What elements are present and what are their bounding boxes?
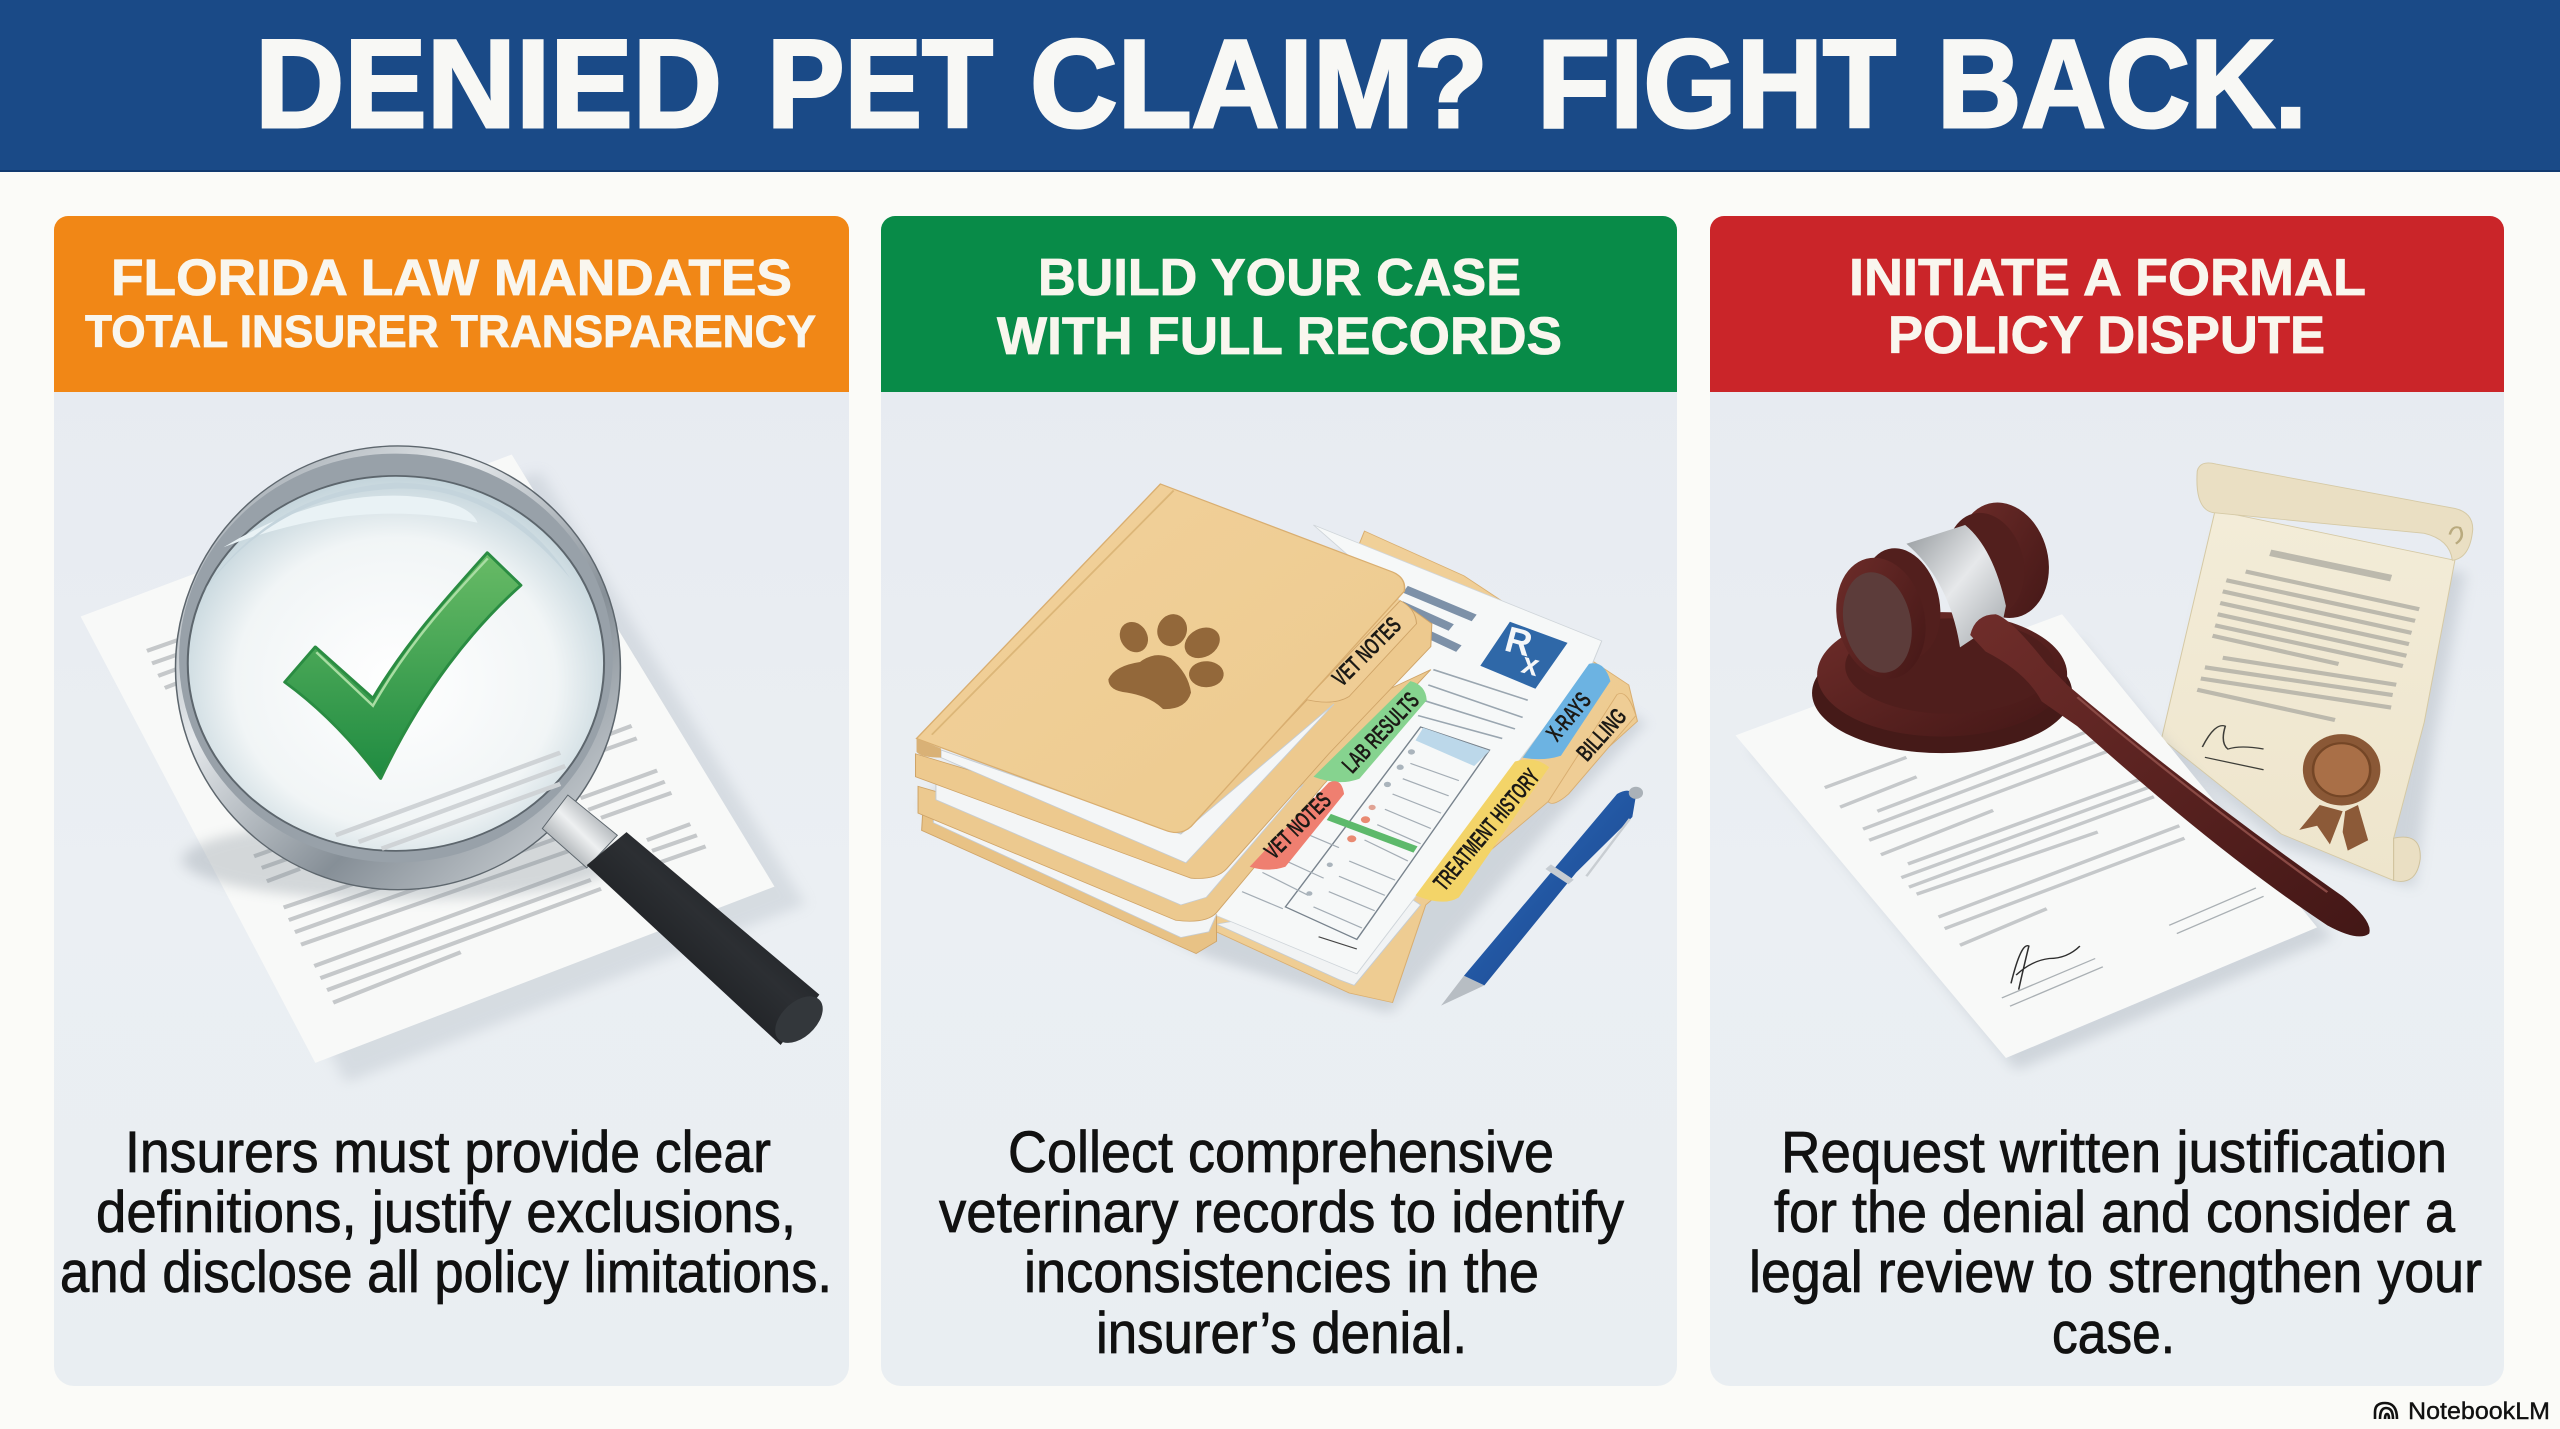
x-rays tab — [1523, 663, 1610, 759]
panel body text: inconsistencies in the — [1024, 1240, 1539, 1305]
title banner: DENIED — [255, 15, 722, 154]
panel heading: INITIATE A FORMAL — [1849, 249, 2366, 307]
panel heading: POLICY DISPUTE — [1888, 306, 2325, 365]
panel heading: WITH FULL RECORDS — [997, 307, 1562, 366]
panel body text: and disclose all policy limitations. — [60, 1240, 832, 1305]
icon: stacked pet record folders and pen — [916, 484, 1645, 1014]
panel: build your case — [881, 216, 1677, 1386]
handle — [542, 795, 832, 1051]
paw print — [1108, 613, 1230, 709]
folder tab labels: LAB RESULTS — [1337, 687, 1425, 779]
panel: Florida law transparency — [54, 216, 849, 1386]
panel body text: veterinary records to identify — [939, 1180, 1624, 1245]
signed document — [1736, 614, 2332, 1070]
panel heading: FLORIDA LAW MANDATES — [111, 249, 792, 306]
folder tab labels: X-RAYS — [1541, 687, 1597, 747]
under sheet — [1217, 892, 1421, 985]
lower folder stack — [916, 601, 1432, 954]
panel heading — [997, 249, 1562, 366]
panel background — [54, 380, 849, 1386]
panel heading: TOTAL INSURER TRANSPARENCY — [85, 306, 816, 357]
panel: formal policy dispute — [1710, 216, 2504, 1386]
title banner — [0, 0, 2560, 172]
panel heading — [85, 249, 816, 357]
panel heading: BUILD YOUR CASE — [1038, 249, 1521, 307]
gavel — [1812, 498, 2370, 936]
panel body text: Insurers must provide clear — [125, 1120, 771, 1185]
check mark — [285, 553, 521, 779]
panel background — [1710, 380, 2504, 1386]
pen — [1441, 787, 1643, 1006]
folder tab labels: VET NOTES — [1327, 612, 1407, 692]
panel body text: insurer’s denial. — [1096, 1301, 1467, 1366]
icon: gavel, signed document and sealed scroll — [1736, 463, 2473, 1070]
wax seal and ribbon — [2299, 734, 2380, 851]
top folder cover — [917, 484, 1405, 833]
panel body text: legal review to strengthen your — [1749, 1240, 2482, 1305]
billing tab — [1548, 693, 1636, 803]
lens rim — [176, 446, 620, 890]
top vet notes tab — [1306, 601, 1417, 702]
folder tab labels: TREATMENT HISTORY — [1428, 764, 1546, 896]
panel body text: Collect comprehensive — [1008, 1120, 1554, 1185]
panel body text: for the denial and consider a — [1774, 1180, 2456, 1245]
panel heading — [1849, 249, 2366, 365]
lab results tab — [1313, 681, 1427, 782]
back folder — [1204, 531, 1637, 1003]
panel body text — [939, 1120, 1624, 1366]
title banner: CLAIM? — [1030, 15, 1488, 154]
treatment history tab — [1416, 760, 1549, 902]
prescription sheet — [1214, 525, 1602, 974]
panel body text — [60, 1120, 832, 1305]
folder tab labels: BILLING — [1572, 703, 1632, 767]
folder tab labels: R — [1501, 618, 1537, 664]
folder tab labels — [1259, 612, 1632, 896]
panel body text: definitions, justify exclusions, — [96, 1180, 796, 1245]
icon: NotebookLM logo — [2375, 1403, 2397, 1419]
icon: magnifying glass with check mark over document — [81, 446, 832, 1083]
title banner: PET — [767, 15, 993, 154]
panel body text: case. — [2052, 1301, 2175, 1366]
red vet notes tab — [1250, 781, 1344, 870]
NotebookLM watermark: NotebookLM — [2408, 1398, 2550, 1425]
lab form — [1242, 727, 1489, 949]
title banner: BACK. — [1937, 15, 2307, 154]
panel body text — [1749, 1120, 2482, 1366]
sealed scroll — [2162, 463, 2473, 888]
folder tab labels: x — [1518, 647, 1543, 683]
orange header band — [54, 216, 849, 392]
panel background — [881, 380, 1677, 1386]
folder tab labels: VET NOTES — [1259, 787, 1337, 865]
green header band — [881, 216, 1677, 392]
panel body text: Request written justification — [1781, 1120, 2447, 1185]
red header band — [1710, 216, 2504, 392]
title banner: FIGHT — [1537, 15, 1896, 154]
